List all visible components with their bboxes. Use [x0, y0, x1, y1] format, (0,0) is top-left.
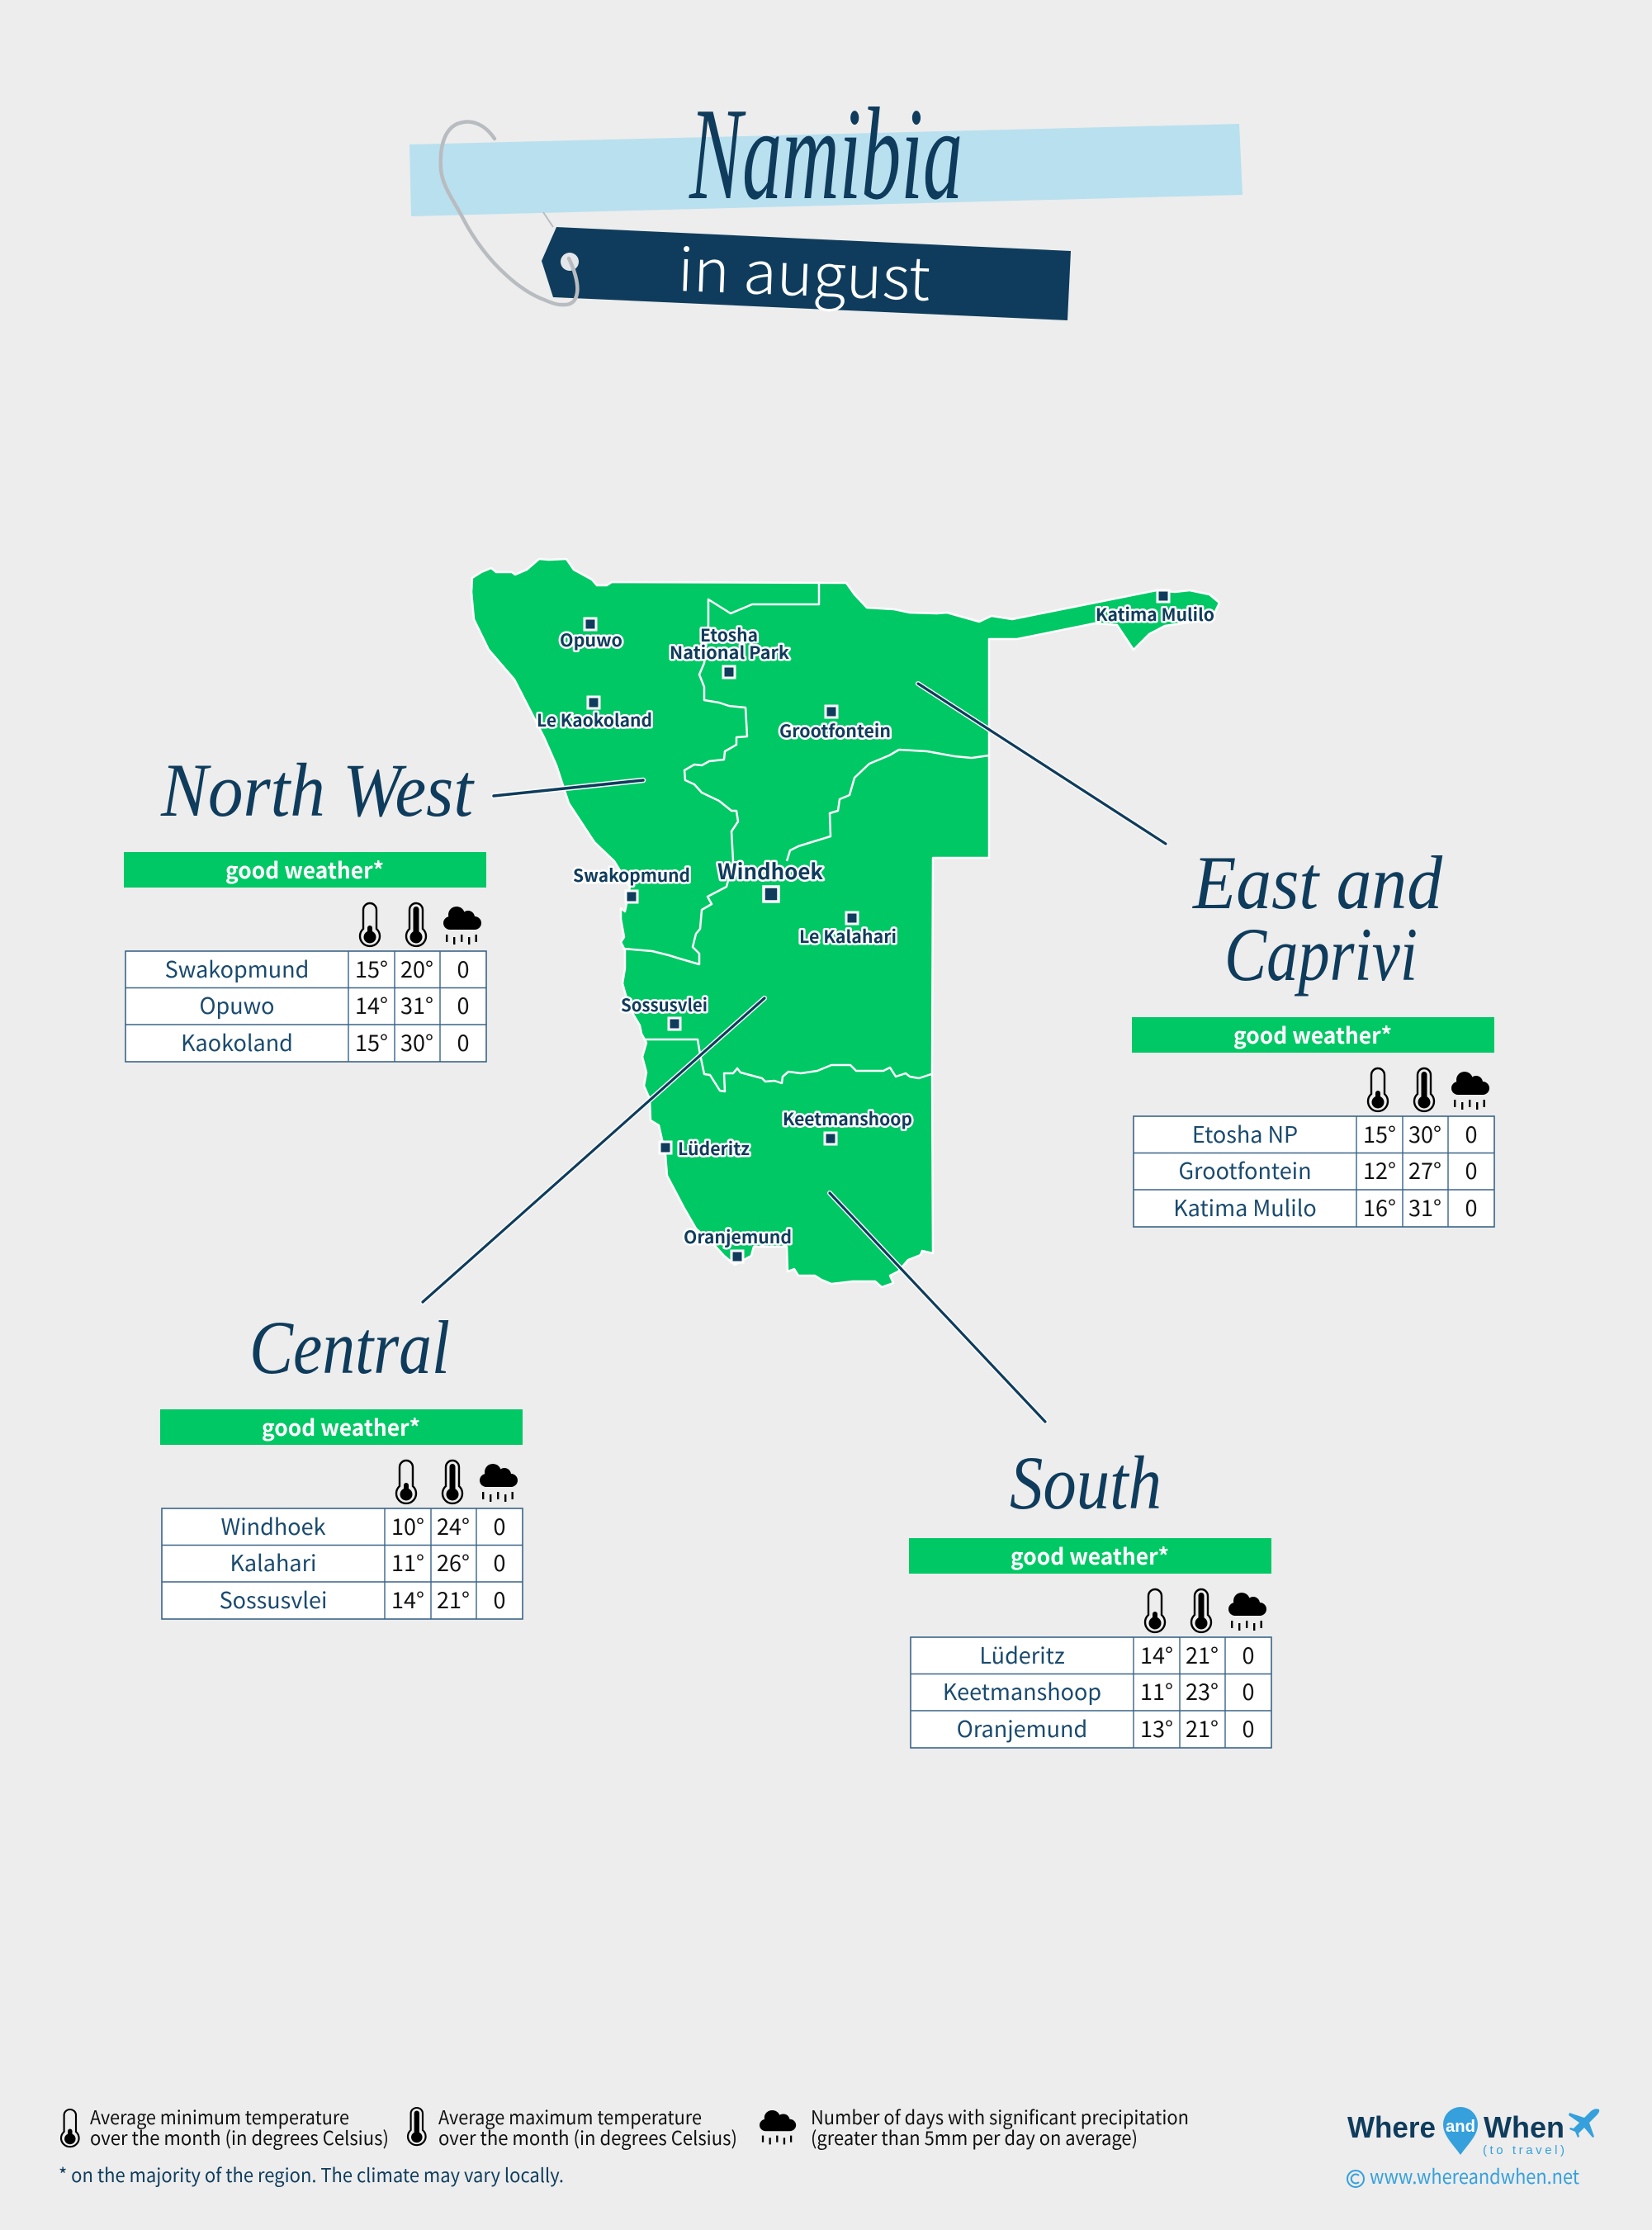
panel: North West	[124, 748, 486, 1062]
legend text: precipitation	[811, 2102, 1189, 2151]
icon: rain cloud	[443, 907, 481, 945]
climate table: 0	[457, 952, 469, 984]
city: Le Kalahari: Le Kalahari	[799, 924, 897, 949]
climate table: 15°	[355, 952, 388, 984]
tag hole	[561, 253, 579, 271]
icon: maximum temperature	[443, 1461, 462, 1503]
status band	[1132, 1017, 1494, 1053]
climate table: Sossusvlei	[220, 1583, 327, 1615]
icon: plane	[1569, 2109, 1599, 2138]
heading: East and Caprivi	[1191, 840, 1443, 997]
legend text: precipitation: (greater than 5mm per day on average)	[811, 2123, 1138, 2151]
icon: minimum temperature	[396, 1461, 416, 1503]
heading: Central: Central	[249, 1305, 450, 1390]
logo wordmark: When: When	[1484, 2110, 1564, 2144]
climate table: 16°	[1363, 1191, 1396, 1223]
city: Oranjemund	[684, 1224, 792, 1262]
icon: maximum temperature	[406, 903, 426, 946]
icon: rain cloud	[1228, 1593, 1266, 1631]
climate table: Katima Mulilo	[1173, 1191, 1317, 1223]
tag ring	[441, 122, 577, 305]
climate table: 0	[1242, 1638, 1255, 1670]
panel: Central	[160, 1305, 523, 1619]
climate table: 21°	[1186, 1638, 1219, 1670]
climate table	[125, 951, 486, 1062]
legend text: precipitation: Number of days with significant precipitation	[811, 2102, 1189, 2130]
icon: minimum temperature	[1145, 1589, 1165, 1632]
legend	[59, 2102, 1189, 2188]
climate table: Opuwo	[199, 988, 275, 1020]
city: Etosha National Park: National Park	[670, 640, 789, 665]
city: Grootfontein	[779, 706, 891, 743]
icon: rain cloud	[1451, 1072, 1489, 1110]
city: Katima Mulilo	[1096, 590, 1214, 627]
leader line: south	[830, 1193, 1045, 1422]
climate table: 30°	[1408, 1117, 1441, 1149]
climate table: Kaokoland	[181, 1025, 293, 1058]
title: Namibia: Namibia	[689, 80, 963, 227]
legend text: minimum temperature: over the month (in degrees Celsius)	[90, 2123, 389, 2151]
country shape	[471, 559, 1219, 1287]
climate table: 11°	[391, 1546, 424, 1578]
climate table: 14°	[391, 1583, 424, 1615]
region border: east	[787, 750, 989, 861]
city: Opuwo: Opuwo	[560, 627, 622, 652]
climate table: 20°	[400, 952, 433, 984]
legend text: maximum temperature	[438, 2102, 737, 2151]
legend text: minimum temperature	[90, 2102, 389, 2151]
title band	[409, 124, 1243, 216]
icon: maximum temperature	[1191, 1589, 1211, 1632]
city: Le Kalahari	[799, 912, 897, 949]
climate table: 11°	[1140, 1674, 1173, 1707]
city: Windhoek	[717, 855, 823, 902]
climate table: 0	[1242, 1674, 1255, 1707]
city: Etosha National Park: Etosha	[700, 623, 758, 647]
logo pin	[1443, 2107, 1478, 2155]
status band: good weather*	[1233, 1018, 1392, 1050]
icon: rain cloud	[480, 1464, 518, 1502]
climate table: 0	[1465, 1153, 1478, 1186]
logo: Where and When	[1347, 2107, 1599, 2190]
climate table: 14°	[1140, 1638, 1173, 1670]
climate table: Swakopmund	[165, 952, 309, 984]
map of Namibia	[471, 559, 1219, 1287]
status band: good weather*	[1011, 1539, 1169, 1571]
climate table: 26°	[437, 1546, 470, 1578]
status band: good weather*	[262, 1410, 420, 1442]
climate table: 21°	[1186, 1712, 1219, 1744]
title block	[409, 80, 1243, 320]
climate table: 12°	[1363, 1153, 1396, 1186]
logo website: www.whereandwhen.net	[1370, 2161, 1579, 2190]
climate table: Windhoek	[221, 1509, 326, 1541]
city: Swakopmund: Swakopmund	[573, 863, 690, 888]
climate table: Grootfontein	[1178, 1153, 1312, 1186]
climate table	[162, 1508, 523, 1619]
climate table: Lüderitz	[979, 1638, 1065, 1670]
city: Le Kaokoland	[537, 697, 652, 732]
city: Windhoek: Windhoek	[717, 855, 823, 886]
climate table: 30°	[400, 1025, 433, 1058]
legend text: maximum temperature: over the month (in degrees Celsius)	[438, 2123, 737, 2151]
climate table: Oranjemund	[957, 1712, 1087, 1744]
climate table: 14°	[355, 988, 388, 1020]
icon: copyright	[1347, 2171, 1364, 2187]
leader line: central	[423, 998, 764, 1302]
climate table: 27°	[1408, 1153, 1441, 1186]
climate table: 0	[494, 1509, 505, 1541]
climate table: 0	[457, 988, 469, 1020]
city: Keetmanshoop: Keetmanshoop	[783, 1106, 912, 1131]
climate table: 15°	[355, 1025, 388, 1058]
logo tagline: (to travel)	[1483, 2143, 1564, 2157]
legend text: minimum temperature: Average minimum temperature	[90, 2102, 349, 2130]
climate table	[911, 1637, 1271, 1748]
climate table	[1134, 1116, 1494, 1227]
status band: good weather*	[225, 853, 384, 885]
status band	[124, 852, 486, 888]
icon: legend rain cloud	[760, 2110, 796, 2144]
region border: north west	[623, 584, 819, 964]
city: Etosha National Park	[670, 623, 789, 678]
heading: North West: North West	[160, 748, 475, 832]
status band	[909, 1538, 1271, 1574]
climate table: 24°	[437, 1509, 470, 1541]
icon: minimum temperature	[360, 903, 380, 946]
icon: maximum temperature	[1414, 1068, 1434, 1111]
climate table: 0	[457, 1025, 469, 1058]
city: Sossusvlei	[621, 992, 708, 1030]
city: Keetmanshoop	[783, 1106, 912, 1144]
heading: South: South	[1010, 1441, 1162, 1525]
subtitle: in august: in august	[676, 221, 932, 318]
climate table: 0	[1465, 1117, 1478, 1149]
climate table: 31°	[400, 988, 433, 1020]
city: Lüderitz: Lüderitz	[678, 1136, 750, 1161]
climate table: 15°	[1363, 1117, 1396, 1149]
climate table: 0	[1242, 1712, 1255, 1744]
climate table: 0	[494, 1583, 505, 1615]
climate table: 13°	[1140, 1712, 1173, 1744]
city: Le Kaokoland: Le Kaokoland	[537, 708, 652, 732]
panel: South	[909, 1441, 1271, 1748]
leader line: north west	[494, 780, 643, 796]
climate table: Etosha NP	[1192, 1117, 1298, 1149]
climate table: Keetmanshoop	[943, 1674, 1101, 1707]
climate table: 31°	[1408, 1191, 1441, 1223]
climate table: 21°	[437, 1583, 470, 1615]
subtitle tag	[542, 227, 1071, 320]
climate table: 10°	[391, 1509, 424, 1541]
city: Katima Mulilo: Katima Mulilo	[1096, 602, 1214, 627]
panel: East and Caprivi	[1132, 840, 1494, 1227]
region border: south	[644, 1039, 931, 1091]
logo word: and: and	[1446, 2118, 1475, 2136]
climate table: 0	[494, 1546, 505, 1578]
logo wordmark: Where: Where	[1347, 2110, 1436, 2144]
footnote: * on the majority of the region. The climate may vary locally.	[59, 2160, 564, 2188]
city: Sossusvlei: Sossusvlei	[621, 992, 708, 1017]
legend text: maximum temperature: Average maximum temperature	[438, 2102, 702, 2130]
icon: legend maximum temperature	[408, 2108, 426, 2145]
status band	[160, 1409, 523, 1445]
leader line: east	[918, 684, 1166, 844]
heading: East and Caprivi: East and	[1191, 840, 1443, 925]
tag string	[543, 212, 553, 227]
icon: legend minimum temperature	[61, 2109, 79, 2147]
city: Oranjemund: Oranjemund	[684, 1224, 792, 1249]
icon: minimum temperature	[1368, 1068, 1388, 1111]
climate table: 23°	[1186, 1674, 1219, 1707]
climate table: 0	[1465, 1191, 1478, 1223]
city: Grootfontein: Grootfontein	[779, 718, 891, 743]
city: Swakopmund	[573, 863, 690, 902]
heading: East and Caprivi: Caprivi	[1224, 912, 1418, 997]
climate table: Kalahari	[230, 1546, 317, 1578]
